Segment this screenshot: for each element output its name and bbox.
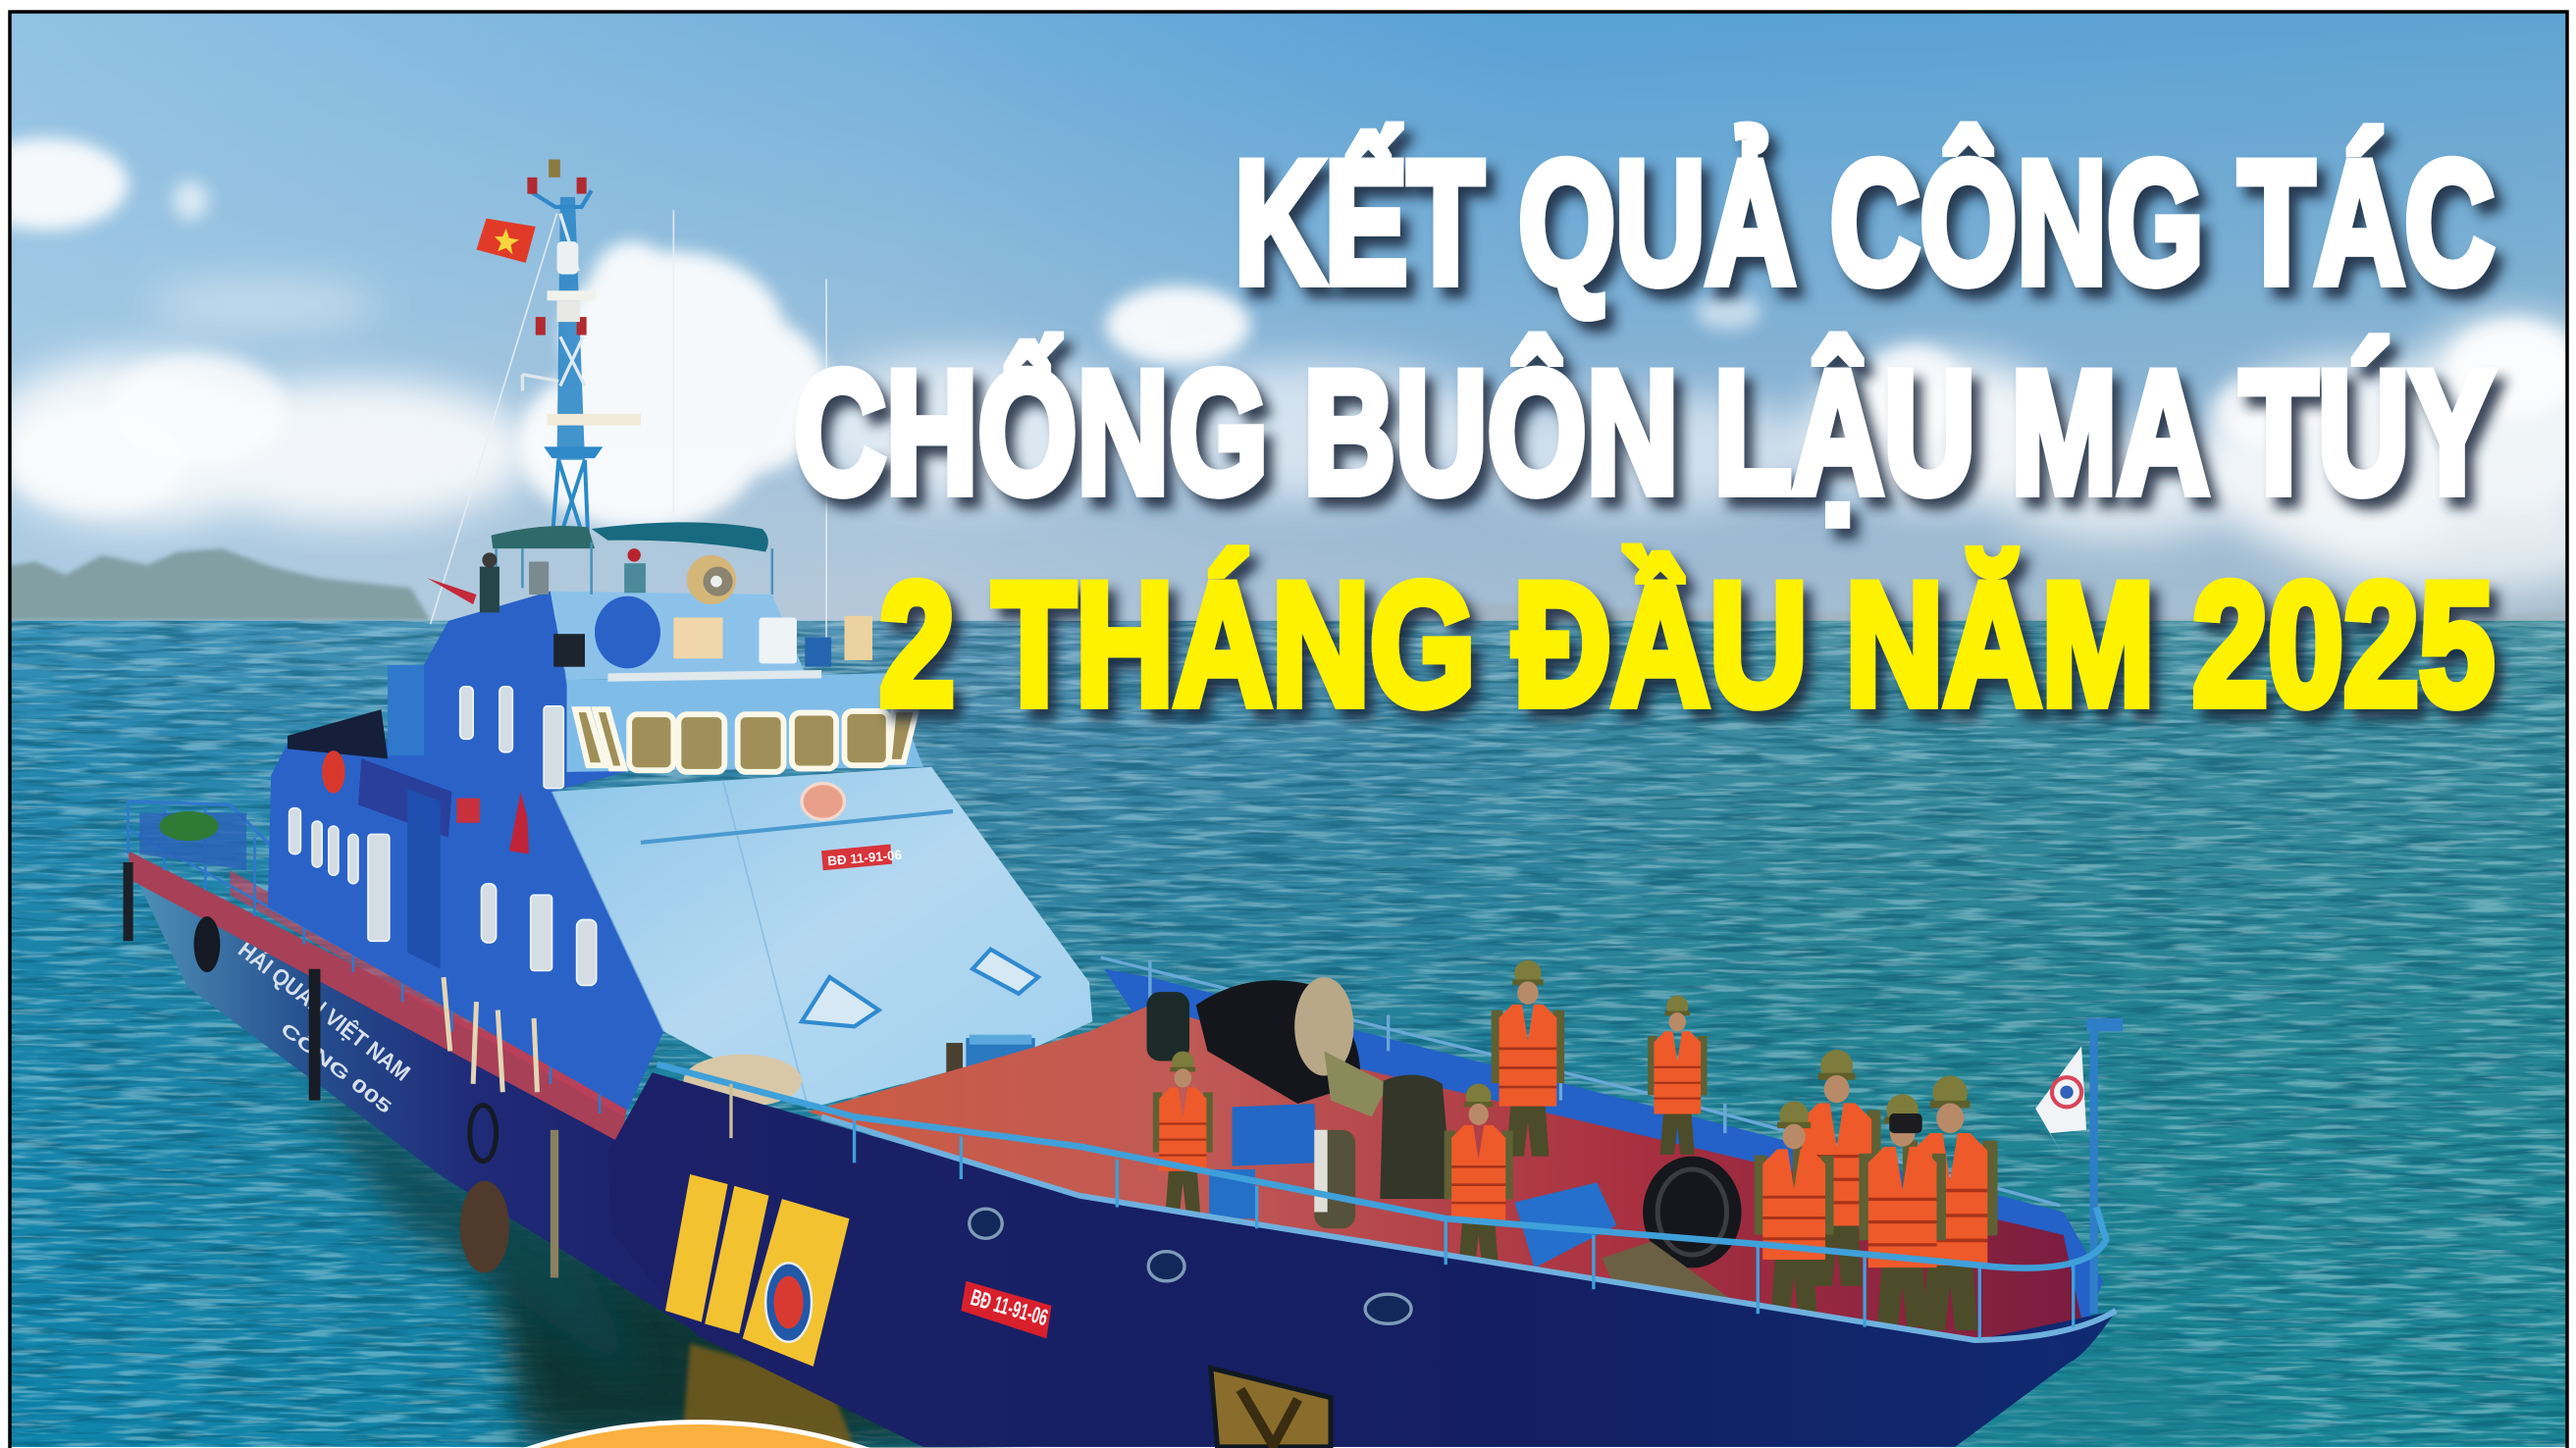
searchlight and deck equipment [673,555,872,667]
title [794,125,2495,742]
mast [431,159,826,641]
deck equipment [1209,1075,1742,1308]
far-side bulwark [1104,969,2103,1327]
sea [12,620,2565,1448]
stern hull name: CÔNG 005 [277,1018,395,1117]
rope drum under tarp [1147,977,1389,1116]
side wall details [288,665,597,985]
customs emblem [765,1263,812,1342]
stern hull [131,867,707,1338]
canopy over the flying bridge [492,522,772,595]
bridge windows [575,709,917,772]
forward superstructure [552,767,1092,1109]
ship [124,159,2123,1447]
crew behind the equipment [1492,960,1881,1286]
far rail [1101,957,2060,1206]
fender, tyres and ropes [124,862,731,1277]
main hull [607,1072,2116,1447]
red hull number plate: BĐ 11-91-06 [968,1284,1051,1330]
crew in orange life vests [1153,1052,1998,1330]
clouds [0,138,2576,592]
yellow customs stripes [665,1174,850,1367]
crew on flying bridge [427,548,646,612]
Vietnamese flag [476,219,536,263]
light blue bridge deck [551,592,923,772]
red side deck and railing [129,802,628,1143]
bow flag on pole [2035,1018,2123,1314]
foredeck [809,1006,2083,1340]
orange circle badge [523,1420,870,1448]
foredeck rail [657,1064,2106,1338]
mountains on the horizon [12,545,2565,621]
anchor recess [1211,1369,1331,1447]
portholes [970,1209,1411,1323]
forward superstructure: BĐ 11-91-06 [827,848,903,868]
red hull number plate [961,1281,1051,1338]
superstructure side wall [268,592,663,1111]
stern hull name: HẢI QUAN VIỆT NAM [234,935,416,1086]
hull sheer strip [821,1116,2116,1340]
sky [0,0,2576,624]
